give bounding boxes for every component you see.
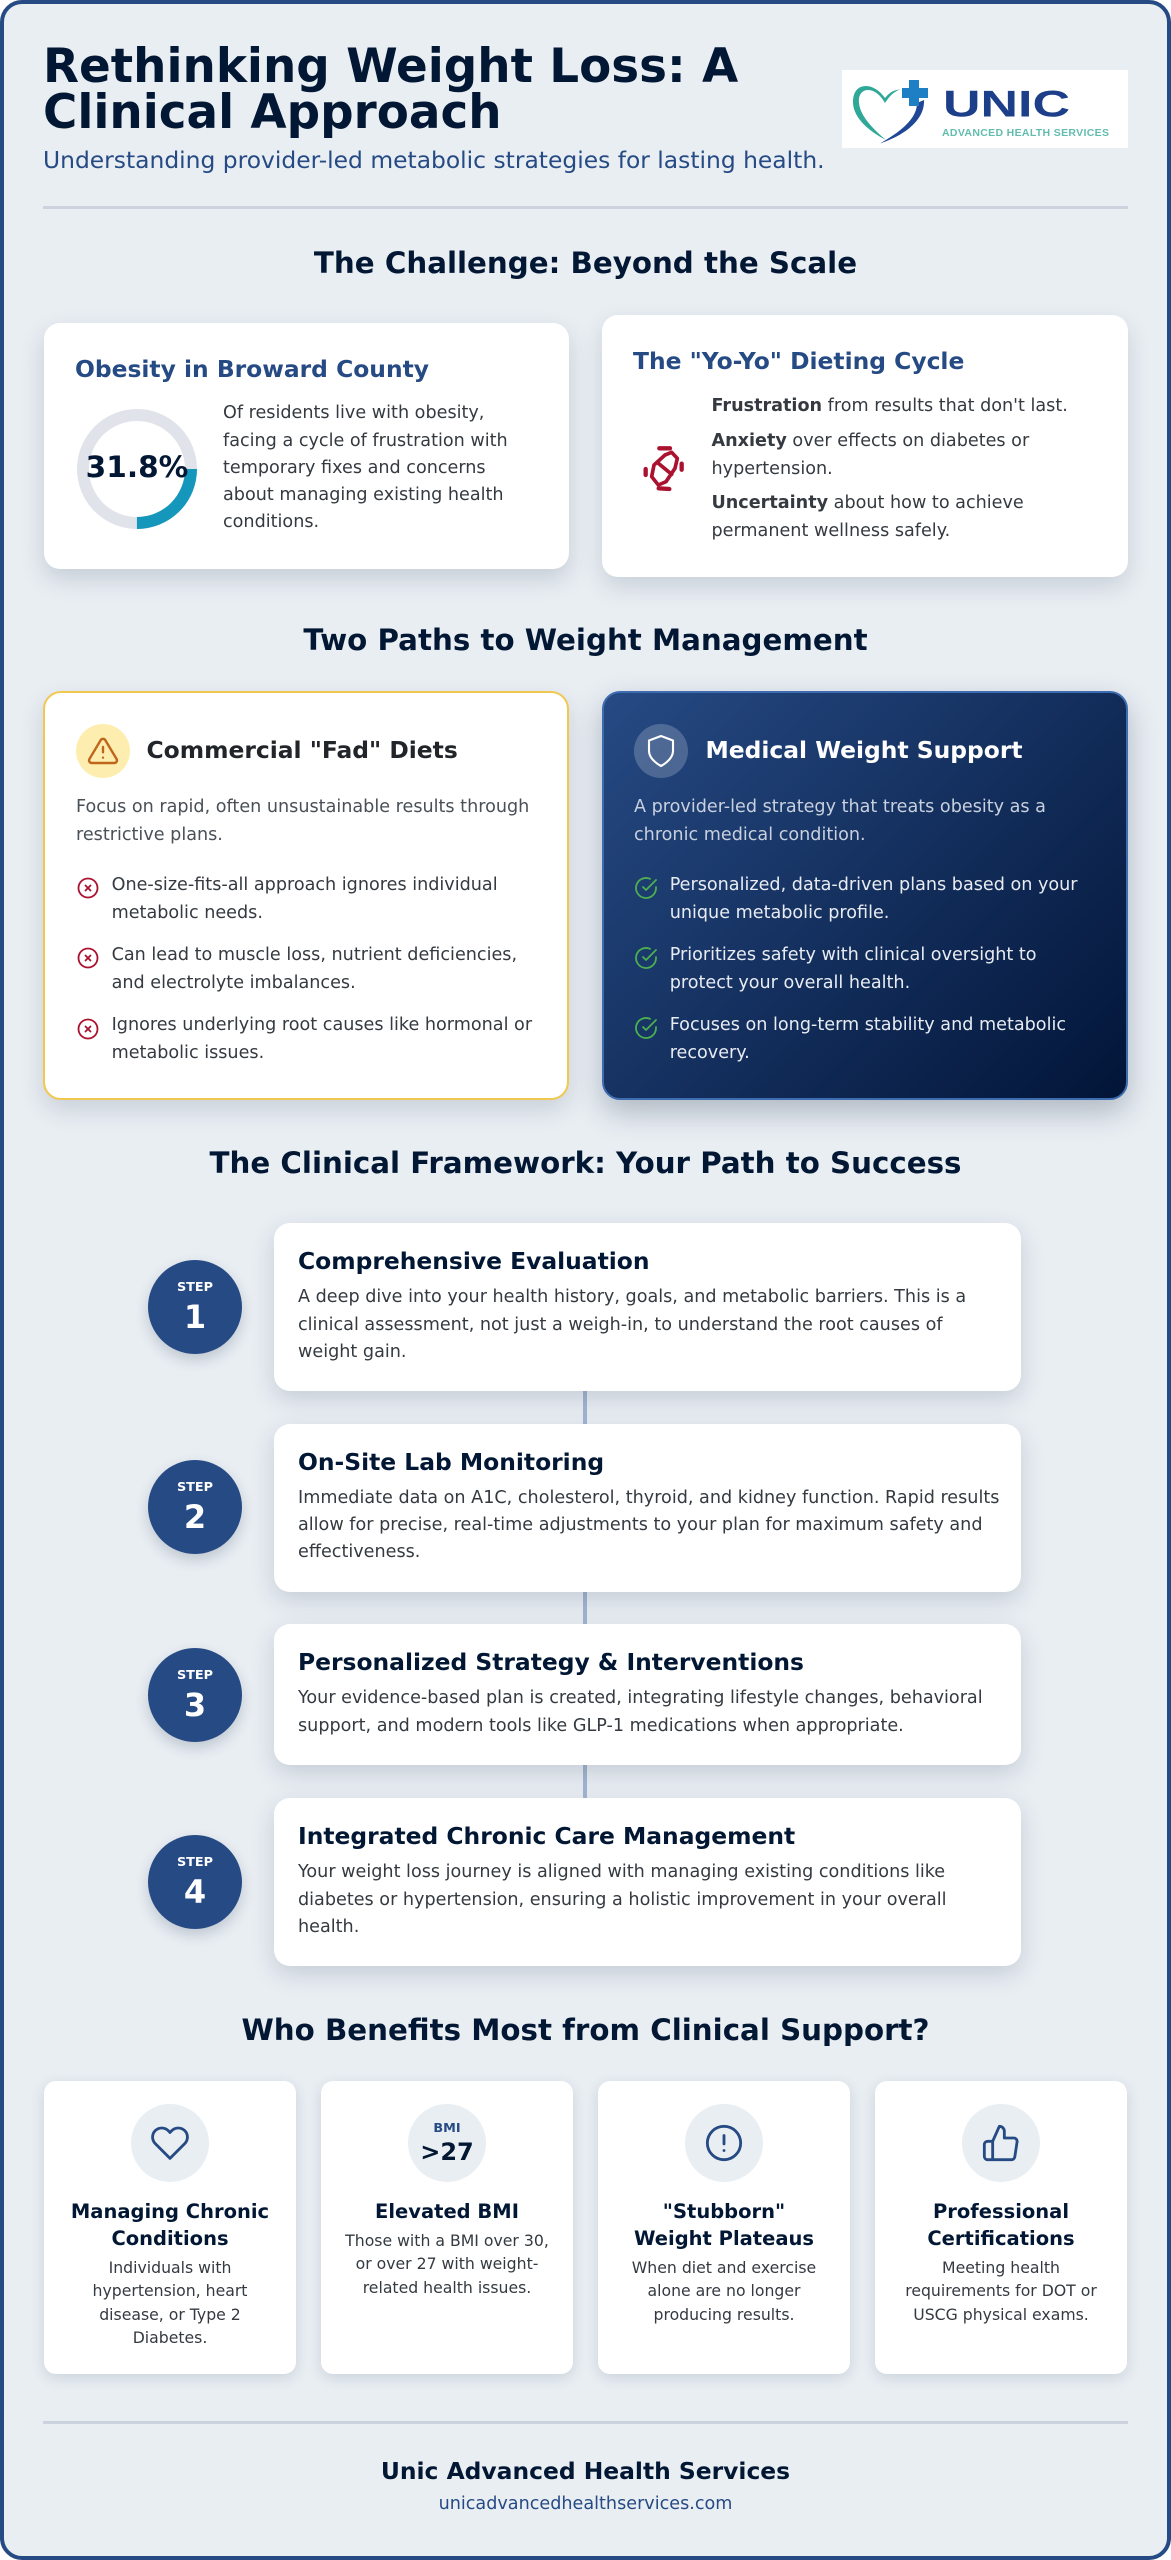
panel: professional certifications: USCG physical exams.	[913, 2305, 1089, 2324]
panel: commercial fad diets	[43, 691, 569, 1100]
step 3 badge: STEP	[177, 1668, 213, 1683]
icon: check	[635, 1017, 657, 1039]
panel intro: chronic medical condition.	[634, 825, 866, 845]
panel: professional certifications: Professional	[933, 2200, 1069, 2223]
step 4 badge: 4	[184, 1873, 206, 1911]
icon: x	[78, 878, 98, 898]
icon: heart	[131, 2104, 209, 2182]
card text: about managing existing health	[223, 485, 504, 505]
icon: alert circle	[685, 2104, 763, 2182]
list item	[112, 945, 517, 993]
list item: Personalized, data-driven plans based on your	[670, 875, 1078, 895]
panel intro: restrictive plans.	[76, 825, 223, 845]
title: Clinical Approach	[43, 86, 502, 140]
panel: professional certifications: Meeting health	[942, 2258, 1060, 2277]
list item: Focuses on long-term stability and metabolic	[670, 1015, 1066, 1035]
panel: yo-yo dieting cycle	[602, 315, 1128, 577]
step 2 badge	[148, 1460, 242, 1554]
icon: check	[635, 947, 657, 969]
list item: One-size-fits-all approach ignores individual	[112, 875, 498, 895]
logo: Unic Advanced Health Services: UNIC	[943, 84, 1070, 125]
step 2 badge: 2	[184, 1498, 206, 1536]
list: uncertainty: permanent wellness safely.	[712, 521, 950, 541]
panel: weight plateaus: When diet and exercise	[632, 2258, 816, 2277]
icon: check	[635, 877, 657, 899]
panel heading: Medical Weight Support	[706, 736, 1023, 764]
card heading: The "Yo-Yo" Dieting Cycle	[633, 347, 964, 375]
list: anxiety	[712, 431, 1030, 479]
list item: protect your overall health.	[670, 973, 910, 993]
icon: shield	[634, 724, 688, 778]
step 2 card: On-Site Lab Monitoring	[298, 1448, 604, 1476]
panel: elevated BMI: related health issues.	[363, 2278, 531, 2297]
step 1 badge: 1	[184, 1298, 206, 1336]
card text: temporary fixes and concerns	[223, 458, 486, 478]
panel: chronic conditions	[44, 2081, 296, 2374]
panel intro	[76, 797, 529, 845]
step 4 badge	[148, 1835, 242, 1929]
subtitle: Understanding provider-led metabolic strategies for lasting health.	[43, 146, 825, 174]
panel: chronic conditions: Conditions	[111, 2227, 229, 2250]
footer: Unic Advanced Health Services	[381, 2457, 790, 2485]
step 1 card: Comprehensive Evaluation	[298, 1247, 650, 1275]
panel: medical weight support	[602, 691, 1128, 1100]
title	[43, 40, 738, 140]
logo: Unic Advanced Health Services: ADVANCED HEALTH SERVICES	[942, 127, 1109, 139]
card text	[223, 403, 508, 532]
donut chart: 31.8%: 31.8%	[86, 450, 188, 484]
list item: and electrolyte imbalances.	[112, 973, 356, 993]
heading: the challenge: The Challenge: Beyond the Scale	[314, 246, 857, 280]
panel: elevated BMI: Those with a BMI over 30,	[345, 2231, 549, 2250]
panel: professional certifications	[875, 2081, 1127, 2374]
panel: elevated BMI	[321, 2081, 573, 2374]
donut chart: 31.8%	[77, 409, 197, 529]
step 1 card: weight gain.	[298, 1342, 406, 1362]
step 4 card: diabetes or hypertension, ensuring a holistic improvement in your overall	[298, 1890, 947, 1910]
list item	[670, 1015, 1066, 1063]
step 3 card: support, and modern tools like GLP-1 medications when appropriate.	[298, 1716, 904, 1736]
list item	[112, 1015, 532, 1063]
panel: weight plateaus: Weight Plateaus	[634, 2227, 814, 2250]
step 2 card: Immediate data on A1C, cholesterol, thyroid, and kidney function. Rapid results	[298, 1488, 999, 1508]
icon: BMI >27	[408, 2104, 486, 2182]
step 1 badge	[148, 1260, 242, 1354]
panel: weight plateaus: "Stubborn"	[663, 2200, 785, 2223]
step 4 card: Integrated Chronic Care Management	[298, 1822, 795, 1850]
step 1 card	[274, 1223, 1021, 1391]
step 4 card: Your weight loss journey is aligned with managing existing conditions like	[298, 1862, 945, 1882]
icon: warning	[76, 724, 130, 778]
list: frustration: Frustration from results that don't last.	[712, 396, 1068, 416]
icon: x	[78, 1018, 98, 1040]
icon: BMI >27: >27	[420, 2138, 474, 2166]
step 3 badge	[148, 1648, 242, 1742]
card text: facing a cycle of frustration with	[223, 431, 508, 451]
footer: unicadvancedhealthservices.com	[439, 2494, 732, 2514]
list: uncertainty	[712, 493, 1024, 541]
step 1 card: clinical assessment, not just a weigh-in, to understand the root causes of	[298, 1315, 943, 1335]
card text: Of residents live with obesity,	[223, 403, 484, 423]
step 3 card: Your evidence-based plan is created, integrating lifestyle changes, behavioral	[298, 1688, 983, 1708]
icon: thumbs up	[962, 2104, 1040, 2182]
list item: metabolic issues.	[112, 1043, 264, 1063]
icon: BMI >27: BMI	[433, 2121, 461, 2136]
list: anxiety: Anxiety over effects on diabetes or	[712, 431, 1029, 451]
step 2 card	[274, 1424, 1021, 1592]
step 4 card: health.	[298, 1917, 359, 1937]
footer	[381, 2457, 790, 2514]
list item	[112, 875, 498, 923]
panel: chronic conditions: Managing Chronic	[71, 2200, 269, 2223]
panel: chronic conditions: Diabetes.	[133, 2328, 207, 2347]
list item: Prioritizes safety with clinical oversight to	[670, 945, 1037, 965]
title: Rethinking Weight Loss: A	[43, 40, 738, 94]
step 2 card: allow for precise, real-time adjustments to your plan for maximum safety and	[298, 1515, 982, 1535]
heading: clinical framework: The Clinical Framework: Your Path to Success	[209, 1146, 962, 1180]
icon: x	[78, 948, 98, 968]
card text: conditions.	[223, 512, 319, 532]
heading: two paths: Two Paths to Weight Management	[303, 623, 868, 657]
step 2 card: effectiveness.	[298, 1542, 420, 1562]
panel: weight plateaus	[598, 2081, 850, 2374]
panel: weight plateaus: producing results.	[654, 2305, 794, 2324]
panel: elevated BMI: Elevated BMI	[375, 2200, 519, 2223]
panel: chronic conditions: disease, or Type 2	[99, 2305, 241, 2324]
step 2 badge: STEP	[177, 1480, 213, 1495]
panel: obesity in Broward County	[44, 323, 569, 569]
panel heading: Commercial "Fad" Diets	[146, 736, 458, 764]
list item: unique metabolic profile.	[670, 903, 889, 923]
card heading: Obesity in Broward County	[75, 355, 429, 383]
step 1 badge: STEP	[177, 1280, 213, 1295]
step 3 card	[274, 1624, 1021, 1765]
panel intro	[634, 797, 1046, 845]
list item: Can lead to muscle loss, nutrient deficiencies,	[112, 945, 517, 965]
panel: chronic conditions: hypertension, heart	[93, 2281, 247, 2300]
list item: metabolic needs.	[112, 903, 263, 923]
icon: cycle	[644, 446, 684, 492]
list: uncertainty: Uncertainty about how to achieve	[712, 493, 1024, 513]
panel: weight plateaus: alone are no longer	[648, 2281, 800, 2300]
step 4 card	[274, 1798, 1021, 1966]
panel: elevated BMI: or over 27 with weight-	[356, 2254, 538, 2273]
panel intro: Focus on rapid, often unsustainable results through	[76, 797, 529, 817]
panel intro: A provider-led strategy that treats obesity as a	[634, 797, 1046, 817]
logo: Unic Advanced Health Services	[842, 70, 1128, 148]
panel: professional certifications: requirements for DOT or	[905, 2281, 1097, 2300]
heading: who benefits: Who Benefits Most from Clinical Support?	[241, 2013, 930, 2047]
step 3 badge: 3	[184, 1686, 206, 1724]
step 3 card: Personalized Strategy & Interventions	[298, 1648, 804, 1676]
list item	[670, 875, 1078, 923]
step 1 card: A deep dive into your health history, goals, and metabolic barriers. This is a	[298, 1287, 966, 1307]
list item: recovery.	[670, 1043, 750, 1063]
step 4 badge: STEP	[177, 1855, 213, 1870]
panel: chronic conditions: Individuals with	[109, 2258, 231, 2277]
list: anxiety: hypertension.	[712, 459, 833, 479]
list item	[670, 945, 1037, 993]
list item: Ignores underlying root causes like hormonal or	[112, 1015, 532, 1035]
panel: professional certifications: Certifications	[927, 2227, 1075, 2250]
